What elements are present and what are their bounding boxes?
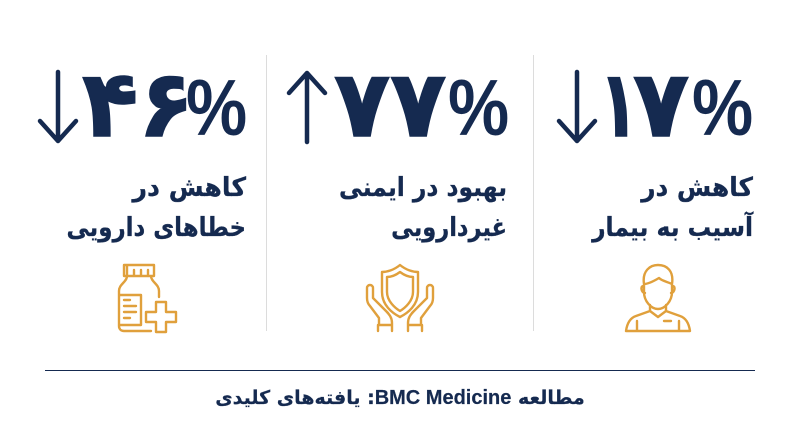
caption: [67, 173, 246, 243]
caption: آسیب به بیمار: [592, 213, 753, 243]
caption: کاهش در: [641, 173, 753, 203]
stat: 77 percent: ۷۷: [334, 51, 446, 158]
stat: 17 percent: ۱: [599, 51, 638, 158]
panel: medication errors: [38, 51, 247, 334]
stat: 17 percent: [599, 51, 689, 158]
percent sign: %: [186, 63, 247, 152]
percent sign: %: [692, 63, 753, 152]
arrow: down: [38, 70, 78, 144]
footer title: مطالعه BMC Medicine: یافته‌های کلیدی: [215, 387, 585, 409]
caption: خطاهای دارویی: [67, 213, 246, 243]
caption: کاهش در: [132, 173, 246, 203]
caption: غیردارویی: [391, 213, 507, 243]
caption: [591, 173, 754, 243]
arrow: down: [556, 70, 598, 144]
icon: medicine bottle with cross: [118, 264, 178, 334]
icon: hands holding shield: [366, 264, 434, 332]
caption: بهبود در ایمنی: [339, 173, 507, 203]
arrow: up: [286, 70, 328, 144]
panel: non-medication safety: [286, 51, 509, 332]
percent sign: %: [448, 63, 509, 152]
stat: 17 percent: ۷: [633, 51, 689, 158]
panel: patient harm: [556, 51, 754, 332]
stat: 46 percent: ۴۶: [82, 51, 194, 158]
caption: [339, 173, 507, 243]
